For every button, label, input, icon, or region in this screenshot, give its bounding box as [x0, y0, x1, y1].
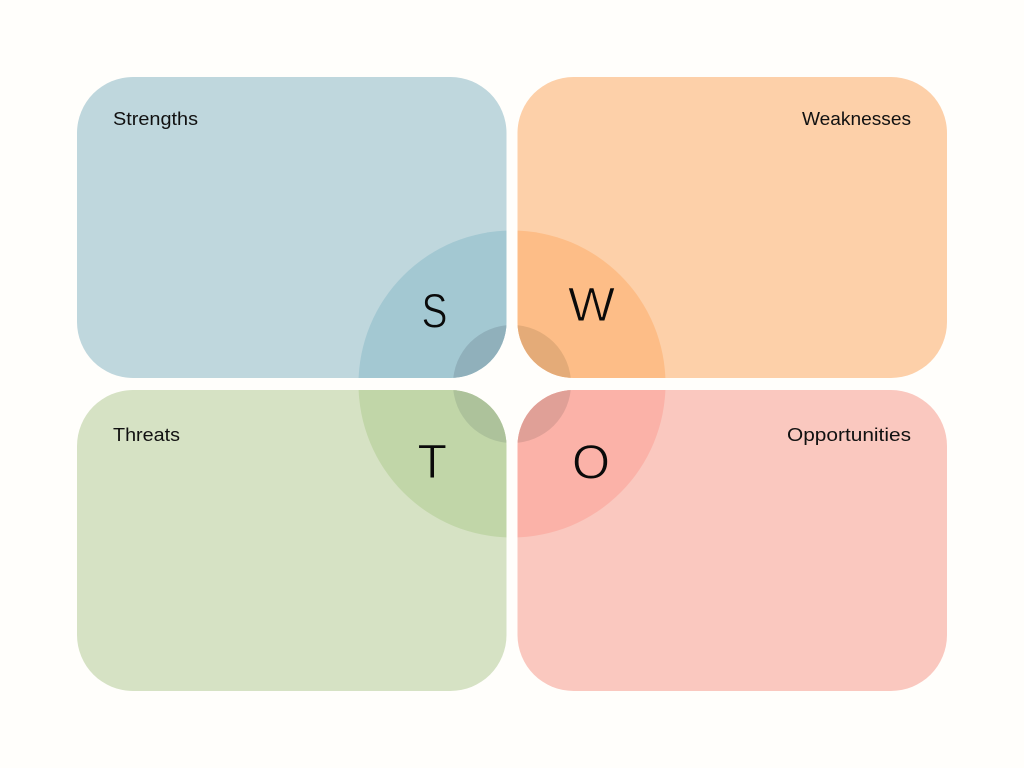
SWOT diagram — [77, 77, 947, 691]
letter: T: T — [418, 436, 447, 489]
heading: opportunities: Opportunities — [787, 425, 911, 445]
heading: weaknesses: Weaknesses — [802, 109, 911, 129]
letter: O: O — [572, 436, 610, 490]
heading: threats: Threats — [113, 425, 180, 445]
panel: threats — [77, 390, 506, 691]
letter: S: S — [422, 286, 448, 338]
panel: strengths — [77, 77, 506, 378]
heading: strengths: Strengths — [113, 109, 198, 129]
letter: W: W — [568, 279, 616, 332]
panel: weaknesses — [518, 77, 947, 378]
panel: opportunities — [518, 390, 947, 691]
